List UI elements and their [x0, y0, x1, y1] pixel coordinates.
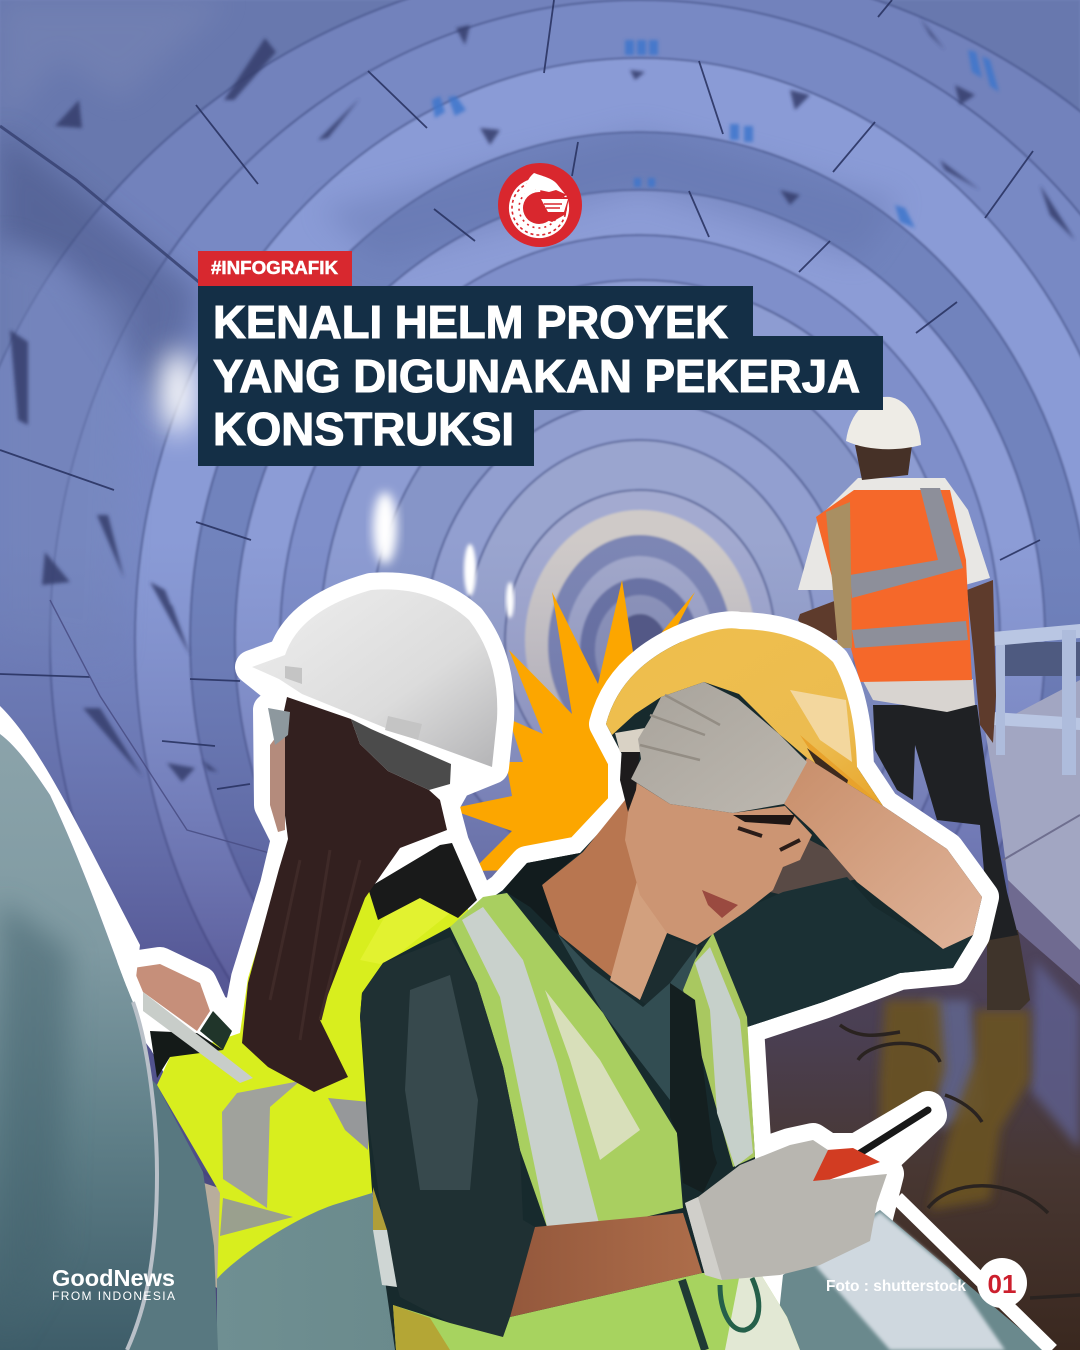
hard hat — [846, 397, 921, 449]
water reflections — [880, 1000, 1030, 1210]
forearm — [510, 1213, 702, 1317]
mouth — [702, 890, 738, 918]
vest right panel — [683, 933, 755, 1167]
face — [625, 780, 812, 945]
hashtag tag: #INFOGRAFIK — [211, 258, 338, 278]
brand: GoodNews from Indonesia — [52, 1265, 175, 1303]
shirt chest — [557, 933, 697, 1120]
face — [270, 725, 285, 832]
vest centre dark — [670, 983, 717, 1193]
reflective bands — [222, 1081, 300, 1208]
title — [198, 286, 883, 466]
steel roll bottom left — [0, 706, 218, 1350]
hashtag tag — [198, 251, 352, 286]
hair — [242, 697, 447, 1092]
vest left highlight — [545, 990, 640, 1160]
vest — [816, 490, 972, 682]
background worker in orange vest — [798, 397, 1030, 1010]
glasses — [268, 708, 290, 745]
vest lower — [393, 1273, 800, 1350]
hard hat white — [252, 589, 497, 767]
head — [855, 445, 912, 480]
sticker outline — [133, 589, 982, 1350]
title: KONSTRUKSI — [213, 403, 514, 455]
title: YANG DIGUNAKAN PEKERJA — [213, 350, 860, 402]
left sleeve — [360, 937, 535, 1337]
helmet suspension — [351, 719, 451, 790]
wall pockets — [10, 18, 1075, 782]
tunnel floor — [740, 900, 1080, 1350]
page number: 01 — [988, 1269, 1016, 1299]
railing — [993, 624, 1080, 775]
glove on hand — [685, 1140, 887, 1280]
logo: red Garuda badge — [498, 163, 582, 247]
body base — [360, 629, 982, 1350]
vest left silver strip — [462, 907, 600, 1227]
tablet — [143, 992, 253, 1083]
shirt — [798, 478, 990, 680]
hard hat yellow — [606, 628, 883, 806]
collar — [503, 853, 580, 937]
visor — [615, 728, 645, 752]
eyes and hair bar — [733, 815, 795, 825]
steel roll bottom middle — [217, 1193, 410, 1350]
light glows — [160, 350, 514, 618]
rebar arcs — [840, 1025, 1080, 1298]
blue marks — [432, 40, 999, 228]
starburst — [449, 580, 695, 871]
woman — [133, 589, 497, 1290]
brand: GoodNews from Indonesia: GoodNews — [52, 1265, 175, 1291]
jacket — [157, 885, 470, 1285]
man — [360, 628, 982, 1350]
figures with sticker outline — [133, 589, 1052, 1350]
shirt hem — [863, 679, 975, 712]
walkway ramp on the right — [985, 680, 1080, 960]
neck — [542, 800, 667, 1000]
walkie talkie — [857, 1110, 928, 1155]
hand — [133, 964, 210, 1031]
raised sleeve — [700, 877, 973, 1027]
collar — [368, 843, 477, 920]
page number — [977, 1258, 1027, 1308]
vest left panel — [450, 893, 683, 1227]
pale gap behind jacket — [195, 1180, 225, 1290]
title: KENALI HELM PROYEK — [213, 296, 728, 348]
brand: GoodNews from Indonesia: FROM INDONESIA — [52, 1289, 175, 1303]
vest hem reflective — [373, 1187, 387, 1230]
arms — [798, 580, 996, 743]
raised arm — [784, 758, 982, 949]
pants — [873, 705, 1018, 940]
boot — [987, 930, 1030, 1010]
wall joints — [0, 0, 1040, 854]
glove on forehead — [631, 682, 807, 813]
soft shadows on wall — [0, 0, 230, 130]
steel roll bottom right — [775, 1198, 1052, 1350]
blurred backdrop beside face — [770, 835, 862, 895]
dark under sleeve — [150, 1031, 223, 1078]
hair at nape — [620, 745, 640, 812]
photo credit: Foto : shutterstock — [826, 1278, 966, 1295]
sleeve cuff — [200, 1011, 232, 1050]
